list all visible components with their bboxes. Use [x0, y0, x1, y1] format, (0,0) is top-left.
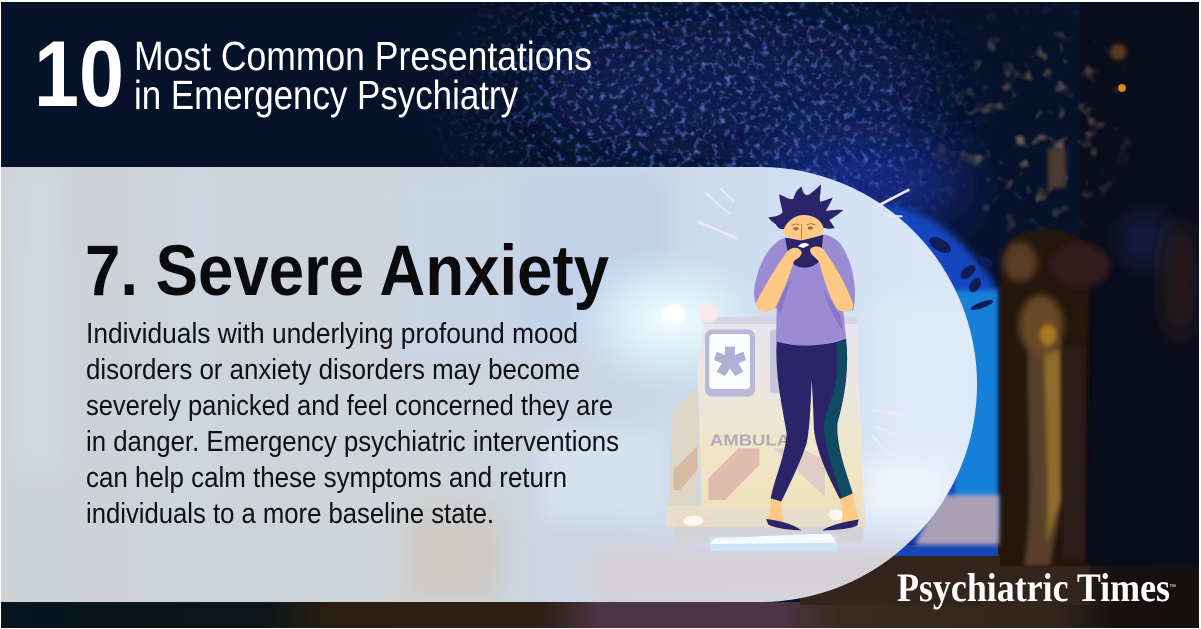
- series title: [34, 21, 592, 126]
- series title: 10: [34, 21, 124, 126]
- translucent rounded panel with faded forest scene: [1, 167, 978, 602]
- series title: Most Common Presentations: [134, 33, 592, 79]
- ambulance lettering: AMBULA: [710, 433, 790, 450]
- description text: in danger. Emergency psychiatric interventions: [86, 426, 619, 458]
- main heading: 7. Severe Anxiety: [85, 232, 609, 311]
- ambulance (faded): [663, 304, 865, 551]
- head: [783, 215, 823, 240]
- icon: anxious woman covering her mouth: [699, 184, 908, 530]
- leggings side stripe: [824, 338, 853, 498]
- description text: individuals to a more baseline state.: [86, 498, 494, 530]
- description text: severely panicked and feel concerned they are: [86, 390, 613, 422]
- left arm and hand: [756, 248, 802, 312]
- shirt shading: [777, 278, 843, 332]
- ambulance rear window with star of life: [705, 329, 755, 397]
- logo: Psychiatric Times: ™: [1169, 584, 1176, 591]
- emergency lights: [663, 304, 718, 323]
- series title: in Emergency Psychiatry: [134, 72, 518, 118]
- right arm and hand: [810, 246, 853, 312]
- shirt: [754, 234, 855, 346]
- description text: disorders or anxiety disorders may become: [86, 354, 580, 386]
- leggings: [771, 338, 853, 502]
- tree trunks: [985, 148, 1110, 580]
- hair: [768, 184, 843, 229]
- road: [1, 495, 1199, 628]
- logo: Psychiatric Times: Psychiatric Times: [897, 565, 1170, 610]
- shoes: [766, 519, 859, 530]
- description text: can help calm these symptoms and return: [86, 462, 567, 494]
- dark leaves over the blue light: [929, 237, 994, 310]
- teeth: [798, 243, 809, 248]
- description text: [86, 318, 619, 530]
- ankles: [767, 494, 859, 523]
- description text: Individuals with underlying profound mood: [86, 318, 578, 350]
- face details: [792, 224, 815, 239]
- open mouth behind hands: [785, 235, 823, 268]
- motion lines: [699, 189, 908, 458]
